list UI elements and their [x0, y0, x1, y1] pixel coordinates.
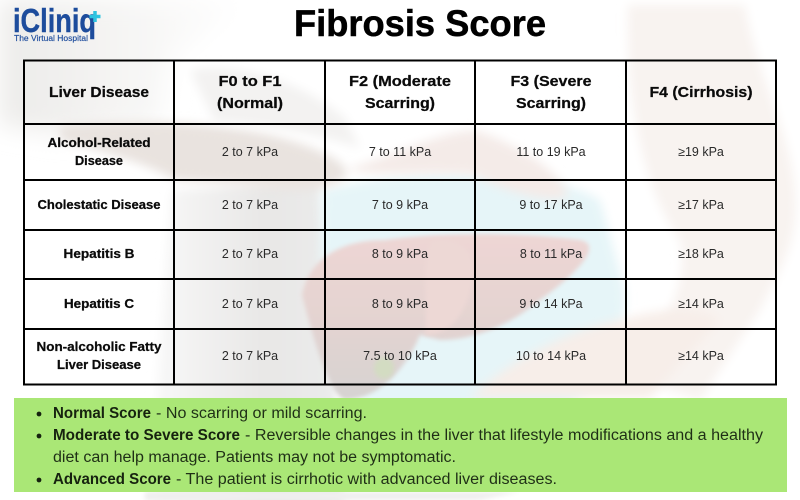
table header row: F0 to F1 [218, 73, 282, 90]
table header row: Liver Disease [49, 84, 149, 101]
row: hepatitis b: ≥18 kPa [678, 247, 724, 261]
upper left shoulder shading [0, 0, 250, 135]
upper forearm and hand [60, 122, 347, 190]
row: cholestatic disease: 2 to 7 kPa [222, 198, 278, 212]
row: non-alcoholic fatty liver disease: 10 to 14 kPa [516, 349, 586, 363]
table: fibrosis score by liver disease [24, 60, 776, 384]
row: hepatitis c: 9 to 14 kPa [519, 297, 583, 311]
row: non-alcoholic fatty liver disease [36, 340, 724, 372]
row: non-alcoholic fatty liver disease: 2 to 7 kPa [222, 349, 278, 363]
row: cholestatic disease: 9 to 17 kPa [519, 198, 583, 212]
row: non-alcoholic fatty liver disease: Non-alcoholic Fatty [36, 340, 162, 354]
logo: iCliniq: The Virtual Hospital [14, 34, 88, 43]
row: alcohol-related disease: 7 to 11 kPa [369, 145, 431, 159]
moderate to severe score: diet can help manage. Patients may not be symptomatic. [53, 449, 456, 466]
row: alcohol-related disease: Alcohol-Related [48, 136, 150, 150]
gallbladder [374, 357, 394, 379]
moderate to severe score: Moderate to Severe Score [53, 427, 240, 444]
liver [302, 234, 589, 400]
row: cholestatic disease: Cholestatic Disease [38, 198, 161, 212]
table header row: Scarring) [365, 95, 435, 112]
row: hepatitis b: 2 to 7 kPa [222, 247, 278, 261]
row: alcohol-related disease: Disease [75, 154, 123, 168]
table header row: Scarring) [516, 95, 586, 112]
table header row [49, 73, 753, 112]
row: alcohol-related disease [48, 136, 724, 168]
normal score: - No scarring or mild scarring. [156, 405, 367, 422]
row: non-alcoholic fatty liver disease: Liver Disease [57, 358, 141, 372]
advanced score: - The patient is cirrhotic with advanced liver diseases. [176, 471, 557, 488]
upper hand right [345, 130, 568, 199]
table header row: F3 (Severe [510, 73, 592, 90]
moderate to severe score [37, 427, 763, 466]
row: hepatitis c [64, 297, 724, 311]
table header row: F2 (Moderate [349, 73, 451, 90]
table header row: (Normal) [217, 95, 283, 112]
row: hepatitis b: 8 to 9 kPa [372, 247, 428, 261]
advanced score: Advanced Score [53, 471, 171, 488]
lower strip under green panel [145, 492, 520, 500]
table header row: F4 (Cirrhosis) [650, 84, 753, 101]
normal score [37, 405, 367, 422]
lower right hand [470, 310, 720, 398]
panel: score explanations [14, 398, 787, 492]
normal score: Normal Score [53, 405, 151, 422]
row: non-alcoholic fatty liver disease: 7.5 to 10 kPa [363, 349, 437, 363]
title: Fibrosis Score [294, 3, 546, 44]
right upper arm [628, 5, 796, 400]
row: alcohol-related disease: ≥19 kPa [678, 145, 724, 159]
row: alcohol-related disease: 2 to 7 kPa [222, 145, 278, 159]
row: cholestatic disease: 7 to 9 kPa [372, 198, 428, 212]
logo: iCliniq: iCliniq [13, 2, 96, 39]
moderate to severe score: - Reversible changes in the liver that lifestyle modifications and a healthy [245, 427, 763, 444]
row: hepatitis c: 2 to 7 kPa [222, 297, 278, 311]
row: non-alcoholic fatty liver disease: ≥14 kPa [678, 349, 724, 363]
row: cholestatic disease: ≥17 kPa [678, 198, 724, 212]
row: hepatitis b [64, 247, 724, 261]
row: alcohol-related disease: 11 to 19 kPa [516, 145, 586, 159]
row: hepatitis c: 8 to 9 kPa [372, 297, 428, 311]
row: hepatitis b: Hepatitis B [64, 247, 134, 261]
torso [148, 180, 345, 500]
row: hepatitis c: Hepatitis C [64, 297, 134, 311]
row: cholestatic disease [38, 198, 724, 212]
pale cyan circle [320, 172, 625, 425]
row: hepatitis b: 8 to 11 kPa [520, 247, 582, 261]
row: hepatitis c: ≥14 kPa [678, 297, 724, 311]
